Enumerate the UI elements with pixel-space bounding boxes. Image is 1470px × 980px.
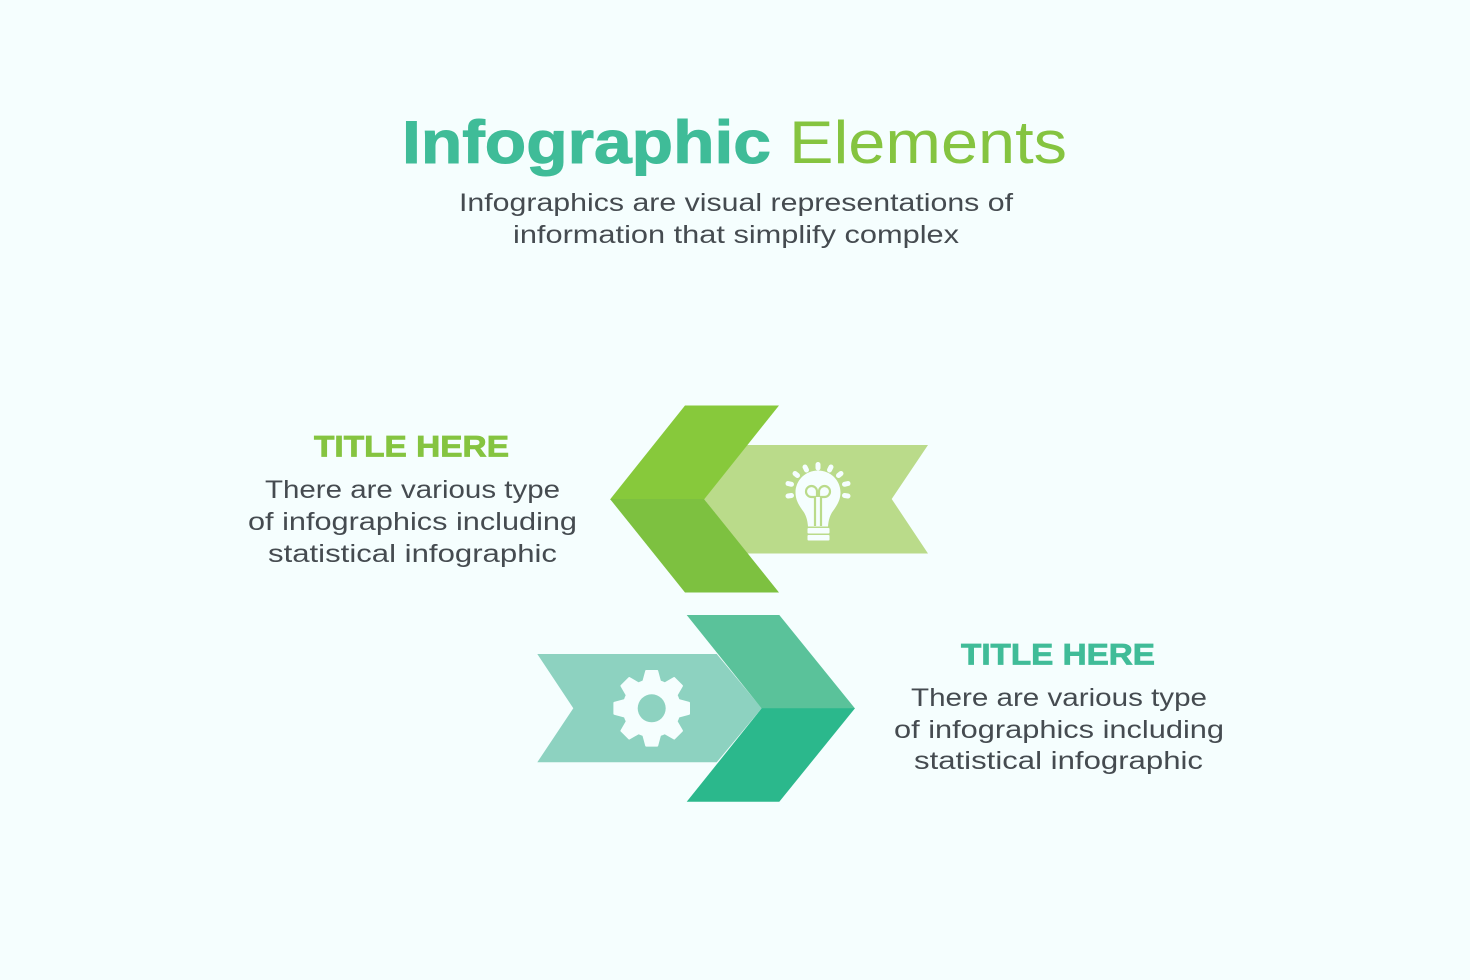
icon: light bulb — [788, 464, 848, 540]
heading: left title: TITLE HERE — [314, 430, 509, 464]
chevron: green — [610, 406, 779, 592]
header — [402, 109, 1067, 249]
subtitle — [459, 189, 1013, 249]
body: left text: There are various type — [265, 476, 560, 504]
subtitle: Infographics are visual representations of — [459, 189, 1013, 217]
title — [402, 109, 1067, 176]
body: right text: statistical infographic — [914, 747, 1203, 775]
body: left text: statistical infographic — [268, 540, 557, 568]
title: Elements — [789, 109, 1067, 176]
body: right text: There are various type — [911, 684, 1207, 712]
ribbon: light teal — [537, 654, 762, 762]
body: left text: of infographics including — [248, 508, 577, 536]
panel: top arrow — [610, 406, 928, 592]
panel: bottom arrow — [537, 615, 855, 802]
body: right text: of infographics including — [894, 716, 1224, 744]
icon: gear — [614, 671, 689, 746]
title: Infographic — [402, 109, 771, 176]
ribbon: light green — [704, 445, 928, 554]
body: right text — [894, 684, 1224, 775]
text block: right — [894, 638, 1224, 775]
heading: right title: TITLE HERE — [961, 638, 1155, 672]
subtitle: information that simplify complex — [513, 221, 960, 249]
body: left text — [248, 476, 577, 568]
text block: left — [248, 430, 577, 568]
chevron: teal — [687, 615, 855, 802]
